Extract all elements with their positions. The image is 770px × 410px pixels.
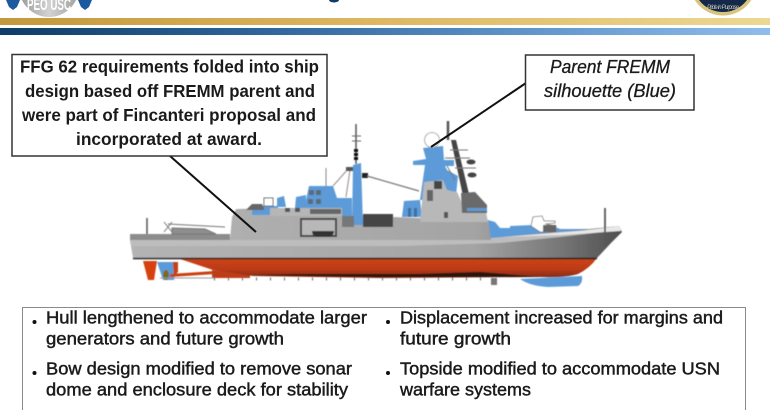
bullet: displacement: future growth bbox=[400, 328, 511, 348]
icon: foremast and radars bbox=[424, 121, 487, 213]
bullet: topside bbox=[386, 358, 720, 400]
bullet: bow design: Bow design modified to remove sonar bbox=[46, 358, 352, 378]
aft deck clutter bbox=[246, 204, 264, 210]
icon: bow sonar dome in blue bbox=[520, 276, 582, 287]
grey hull bbox=[130, 208, 622, 258]
windows bbox=[310, 209, 341, 214]
panel: design changes list bbox=[22, 308, 746, 410]
callout: FFG 62 requirements bbox=[12, 54, 327, 156]
callout: parent FREMM silhouette bbox=[526, 55, 694, 110]
callout: parent FREMM silhouette: silhouette (Blue) bbox=[544, 81, 676, 101]
bullet: hull lengthened bbox=[32, 308, 367, 348]
callout: FFG 62 requirements: FFG 62 requirements folded into ship bbox=[20, 56, 319, 76]
header bar: gold bbox=[0, 18, 770, 25]
keel marks bbox=[214, 278, 481, 280]
bullet: topside: Topside modified to accommodate USN bbox=[400, 358, 720, 378]
bullet: displacement bbox=[386, 308, 723, 348]
aft deck rail bbox=[130, 234, 230, 240]
blue forward deck bbox=[488, 220, 590, 240]
hull upper light band bbox=[130, 226, 621, 246]
callout: FFG 62 requirements: incorporated at award. bbox=[76, 129, 262, 149]
logo: PEO USC seal bbox=[6, 0, 92, 17]
bullet: hull lengthened: Hull lengthened to accommodate larger bbox=[46, 308, 367, 328]
blue midship superstructure bbox=[298, 186, 352, 216]
bullet: topside: warfare systems bbox=[399, 380, 531, 400]
bow staff bbox=[604, 208, 606, 232]
title fragment bbox=[329, 0, 339, 2]
icon: rudder and propeller bbox=[143, 261, 250, 280]
bullet: bow design: dome and enclosure deck for stability bbox=[46, 380, 348, 400]
leader line: left callout bbox=[170, 156, 256, 232]
red lower hull bbox=[177, 258, 597, 278]
grey bridge block bbox=[420, 180, 488, 222]
icon: helicopter bbox=[164, 222, 225, 234]
callout: FFG 62 requirements: design based off FREMM parent and bbox=[25, 81, 315, 101]
waterline bbox=[133, 258, 597, 260]
bullet: displacement: Displacement increased for margins and bbox=[400, 308, 723, 328]
icon: boat bay bbox=[301, 219, 336, 237]
bullet: bow design bbox=[32, 358, 352, 400]
grey midship block bbox=[270, 208, 342, 216]
blue forward tower bbox=[413, 146, 458, 200]
icon: forward gun bbox=[531, 216, 556, 232]
cable between masts bbox=[367, 176, 419, 191]
ship illustration bbox=[130, 121, 622, 287]
callout: FFG 62 requirements: were part of Fincanteri proposal and bbox=[21, 105, 316, 125]
logo: navy seal bbox=[690, 0, 756, 16]
leader line: right callout bbox=[431, 83, 526, 147]
logo: navy seal: Pride in Purpose bbox=[707, 5, 740, 11]
bullet: hull lengthened: generators and future growth bbox=[46, 328, 284, 348]
icon: main mast bbox=[326, 124, 368, 197]
header bar: blue bbox=[0, 28, 770, 35]
callout: parent FREMM silhouette: Parent FREMM bbox=[550, 57, 670, 77]
